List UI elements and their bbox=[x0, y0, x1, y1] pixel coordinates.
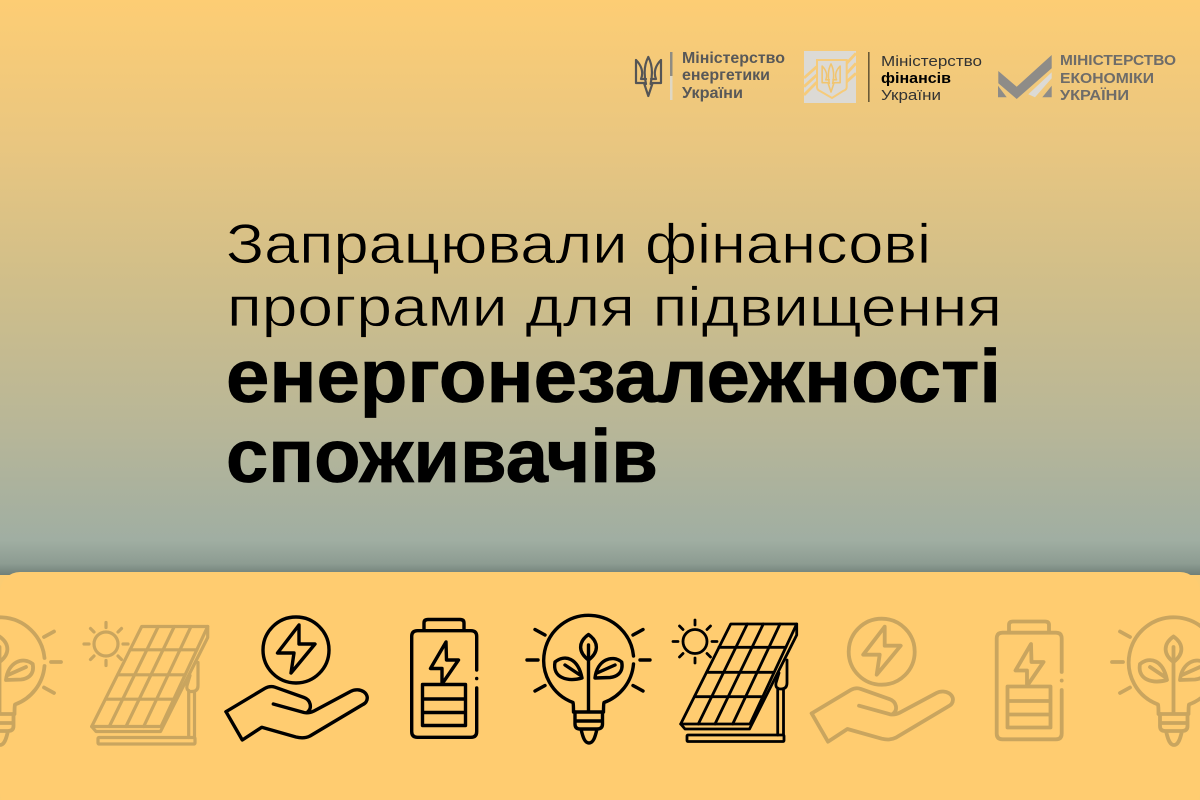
ministry name text: України bbox=[881, 87, 941, 104]
background gradient bbox=[0, 0, 1200, 575]
icon: hand with energy bbox=[226, 617, 367, 740]
icon: trident bbox=[636, 57, 661, 96]
icon: faded bulb left bbox=[0, 617, 61, 745]
icon: faded bulb right bbox=[1112, 617, 1200, 745]
title: програми для підвищення bbox=[227, 275, 1002, 338]
ministry name text: МІНІСТЕРСТВО bbox=[1060, 53, 1176, 69]
icon: emblem square bbox=[804, 51, 856, 103]
bottom icon panel bbox=[0, 572, 1200, 800]
icon: eco light bulb bbox=[527, 615, 650, 743]
icon: M mark bbox=[998, 55, 1052, 99]
ministry name text bbox=[881, 53, 982, 104]
title: споживачів bbox=[226, 414, 658, 498]
title bbox=[226, 212, 1002, 498]
ministry name text: Міністерство bbox=[682, 50, 785, 67]
ministry name text: ЕКОНОМІКИ bbox=[1060, 71, 1154, 87]
icon: faded solar panel left bbox=[84, 622, 208, 744]
ministry name text: енергетики bbox=[682, 67, 770, 84]
logo: Ministry of Economy of Ukraine bbox=[998, 53, 1176, 104]
logo: Ministry of Energy of Ukraine bbox=[636, 50, 785, 102]
ministry name text bbox=[1060, 53, 1176, 104]
ministry name text: Міністерство bbox=[881, 53, 982, 70]
icon: battery bbox=[412, 620, 477, 737]
icon: faded battery right bbox=[997, 622, 1062, 739]
ministry name text: УКРАЇНИ bbox=[1060, 87, 1129, 104]
ministry name text: України bbox=[682, 85, 743, 102]
title: Запрацювали фінансові bbox=[226, 212, 931, 275]
logo: Ministry of Finance of Ukraine bbox=[804, 51, 982, 104]
ministry name text bbox=[682, 50, 785, 102]
icon: solar panel bbox=[673, 620, 797, 742]
ministry name text: фінансів bbox=[881, 70, 951, 87]
icon: faded hand right bbox=[812, 619, 953, 742]
title: енергонезалежності bbox=[226, 334, 1001, 418]
